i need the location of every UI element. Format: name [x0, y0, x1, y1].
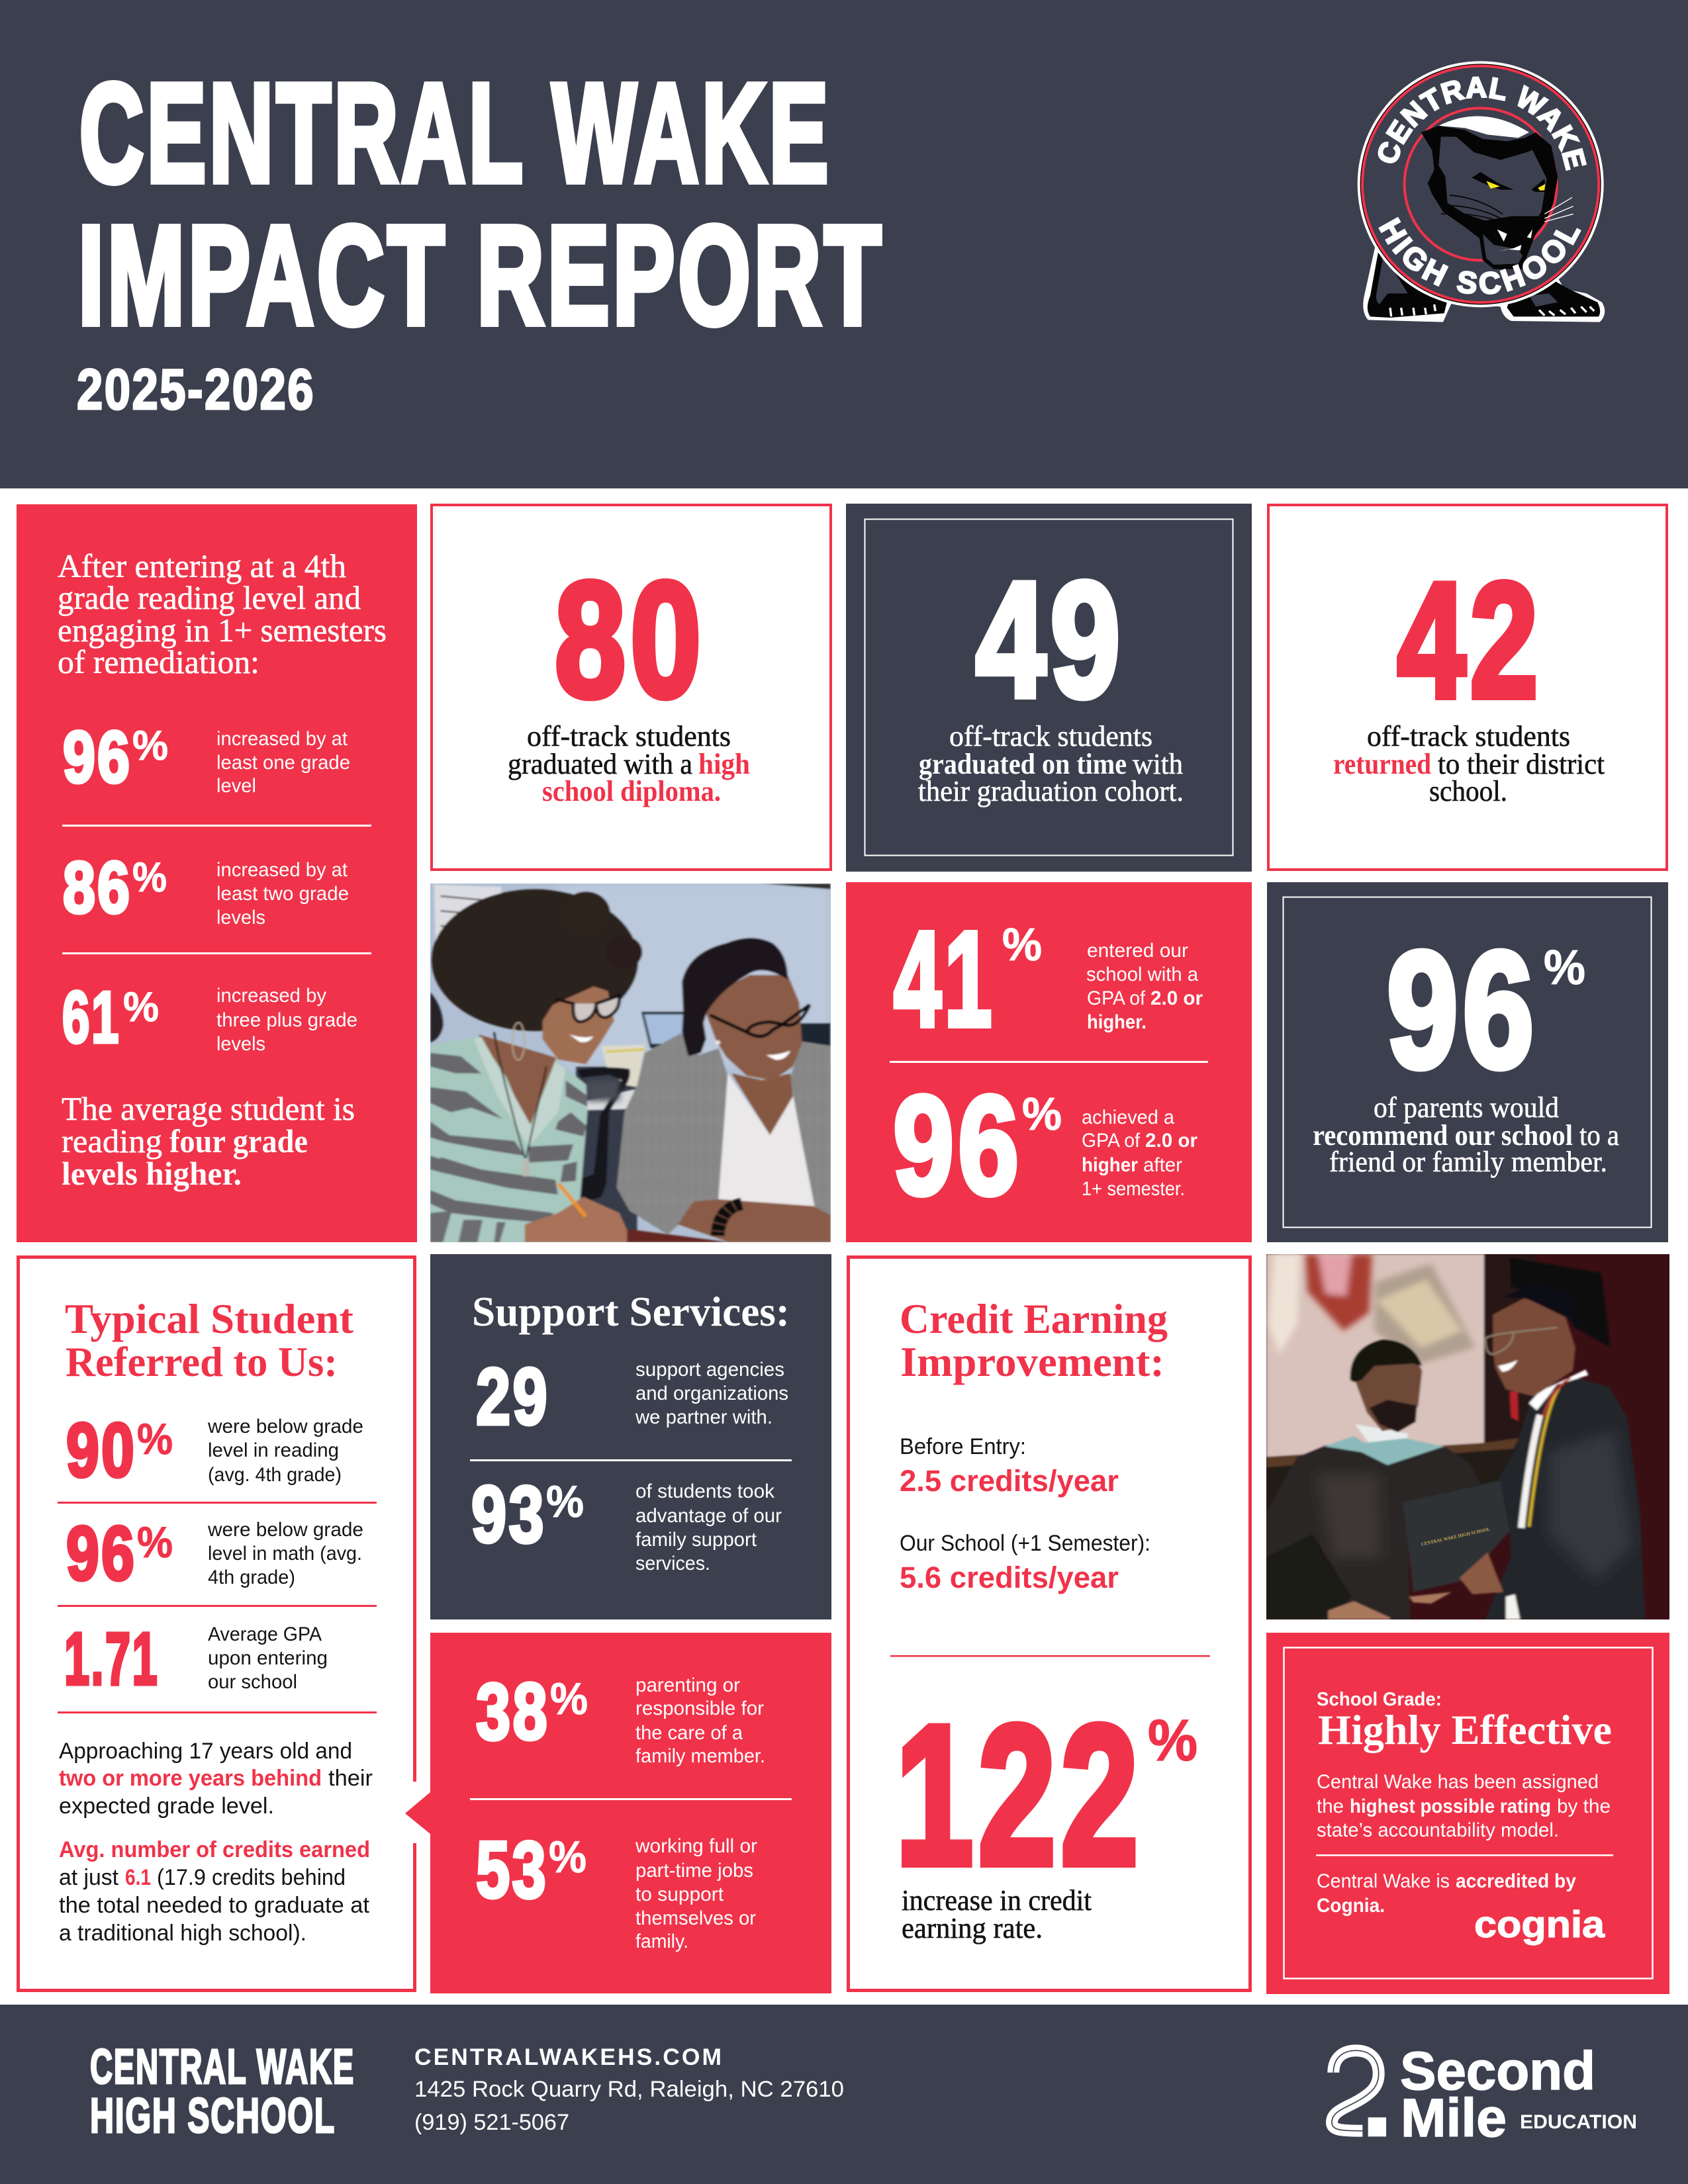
- stat: 61 percent: [62, 977, 357, 1058]
- footer: contact details: [414, 2044, 844, 2135]
- panel: typical student: [19, 1257, 420, 1991]
- stat: 41 percent: 2.0 or: [1150, 987, 1203, 1009]
- footer: school name: [90, 2039, 355, 2143]
- icon: cognia logo: cognia: [1474, 1903, 1605, 1946]
- stat: 90 percent: 90: [66, 1407, 136, 1493]
- panel: 49 on time: [846, 504, 1252, 872]
- stat: 86 percent: [63, 847, 349, 929]
- photo: two women at desk: [430, 884, 831, 1242]
- text: approaching 17: Approaching 17 years old and: [59, 1739, 352, 1764]
- text: accreditation: Cognia.: [1317, 1895, 1385, 1917]
- text: before entry: Before Entry:: [900, 1434, 1026, 1459]
- text: diploma: high: [698, 748, 750, 780]
- icon: second mile education logo: EDUCATION: [1520, 2111, 1637, 2133]
- stat: 86 percent: increased by at: [216, 859, 348, 881]
- heading: credit earning: Improvement:: [900, 1338, 1164, 1385]
- icon: school panther logo: HIGH SCHOOL: [1378, 217, 1581, 295]
- heading: support services: Support Services:: [472, 1288, 790, 1335]
- panel: 80 graduates: [432, 505, 831, 870]
- footer: contact details: CENTRALWAKEHS.COM: [414, 2044, 724, 2070]
- text: accreditation: [1317, 1870, 1576, 1917]
- text: on time: their graduation cohort.: [918, 775, 1184, 807]
- stat: 96 percent math: %: [137, 1518, 173, 1567]
- text: recommend: [1313, 1091, 1619, 1178]
- stat: 41 percent: GPA of: [1087, 987, 1146, 1009]
- text: our school: 5.6 credits/year: [900, 1561, 1119, 1594]
- stat: 96 percent: increased by at: [216, 728, 348, 750]
- stat: 38 percent: %: [550, 1674, 588, 1724]
- text: diploma: off-track students: [527, 720, 731, 752]
- stat: 29 agencies: we partner with.: [635, 1406, 773, 1428]
- panel: reading growth: [17, 504, 417, 1242]
- heading: highly effective: Highly Effective: [1318, 1706, 1612, 1753]
- stat: 86 percent: levels: [216, 907, 265, 929]
- text: accreditation: Central Wake is: [1317, 1870, 1450, 1892]
- heading: credit earning: Credit Earning: [900, 1295, 1168, 1342]
- big number 122 percent: 122: [896, 1684, 1143, 1906]
- title: [78, 54, 884, 353]
- stat: 61 percent: increased by: [216, 985, 326, 1007]
- text: rating: state’s accountability model.: [1317, 1819, 1559, 1841]
- stat: 96 percent GPA: achieved a: [1082, 1107, 1174, 1128]
- footer: contact details: (919) 521-5067: [414, 2110, 569, 2135]
- stat: 93 percent: family support: [635, 1529, 757, 1551]
- stat: 29 agencies: support agencies: [635, 1359, 784, 1381]
- heading: typical student: Typical Student: [65, 1295, 354, 1342]
- stat: 53 percent: working full or: [635, 1835, 757, 1857]
- text: school grade: School Grade:: [1317, 1689, 1442, 1710]
- stat: 93 percent: %: [546, 1477, 584, 1527]
- title: IMPACT REPORT: [78, 197, 884, 353]
- header band: [0, 0, 1688, 488]
- text: our school: [900, 1531, 1150, 1594]
- text: average credits: at just: [59, 1865, 119, 1890]
- stat: 61 percent: 61: [62, 977, 120, 1058]
- text: average credits: the total needed to graduate at: [59, 1893, 370, 1918]
- text: average credits: (17.9 credits behind: [157, 1865, 346, 1890]
- stat: 96 percent math: 96: [66, 1510, 136, 1596]
- stat: 90 percent: [66, 1407, 363, 1493]
- big number 96 percent: 96: [1387, 917, 1538, 1102]
- text: rating: highest possible rating: [1350, 1796, 1551, 1817]
- panel: school grade: [1266, 1633, 1669, 1994]
- footer band: [0, 2005, 1688, 2184]
- stat: 86 percent: 86: [63, 847, 132, 929]
- heading: after entering: of remediation:: [58, 643, 259, 680]
- footer: contact details: 1425 Rock Quarry Rd, Raleigh, NC 27610: [414, 2077, 844, 2102]
- icon: second mile education logo: Second: [1400, 2041, 1595, 2101]
- stat: 96 percent GPA: 2.0 or: [1145, 1130, 1197, 1152]
- text: average credits: 6.1: [125, 1865, 151, 1890]
- stat: 96 percent: least one grade: [216, 752, 350, 774]
- text: our school: Our School (+1 Semester):: [900, 1531, 1150, 1556]
- panel: 42 returned: [1268, 505, 1667, 870]
- text: average credits: Avg. number of credits earned: [59, 1837, 370, 1862]
- stat: 41 percent: [894, 903, 1203, 1055]
- stat: 96 percent: %: [132, 723, 168, 769]
- text: on time: with: [1133, 748, 1183, 780]
- text: average student: [62, 1090, 355, 1192]
- text: rating: the: [1317, 1796, 1344, 1817]
- text: rating: by the: [1557, 1796, 1611, 1817]
- stat: 29 agencies: [476, 1351, 788, 1441]
- text: returned: school.: [1429, 775, 1507, 807]
- stat: 53 percent: 53: [476, 1825, 548, 1915]
- stat: 53 percent: part-time jobs: [635, 1860, 753, 1882]
- stat: 38 percent: parenting or: [635, 1674, 740, 1696]
- panel: support services: [430, 1254, 831, 1619]
- footer: school name: HIGH SCHOOL: [90, 2088, 336, 2143]
- stat: 61 percent: three plus grade: [216, 1009, 357, 1031]
- panel: family responsibilities: [405, 1633, 831, 1993]
- stat: 96 percent GPA: 1+ semester.: [1082, 1178, 1185, 1200]
- stat: 61 percent: levels: [216, 1033, 265, 1055]
- stat: 96 percent GPA: %: [1022, 1088, 1062, 1140]
- stat: 38 percent: [476, 1666, 765, 1767]
- stat: 96 percent: [63, 717, 350, 798]
- stat: 29 agencies: 29: [476, 1351, 549, 1441]
- stat: 53 percent: themselves or: [635, 1907, 756, 1929]
- stat: 38 percent: 38: [476, 1666, 549, 1756]
- text: returned: [1333, 720, 1605, 807]
- stat: 90 percent: %: [137, 1414, 173, 1463]
- text: approaching 17: their: [328, 1766, 373, 1791]
- big number 96 percent: %: [1544, 940, 1585, 995]
- subtitle: year: 2025-2026: [77, 358, 315, 422]
- stat: 96 percent math: level in math (avg.: [208, 1543, 362, 1565]
- text: approaching 17: expected grade level.: [59, 1794, 274, 1819]
- text: recommend: recommend our school: [1313, 1119, 1573, 1152]
- stat: 1.71 GPA: upon entering: [208, 1647, 328, 1669]
- stat: 38 percent: responsible for: [635, 1698, 764, 1719]
- text: returned: returned: [1333, 748, 1431, 780]
- heading: credit earning: [900, 1295, 1168, 1385]
- text: approaching 17: two or more years behind: [59, 1766, 322, 1791]
- text: recommend: to a: [1579, 1119, 1619, 1152]
- text: increase in credit: earning rate.: [902, 1912, 1043, 1944]
- heading: after entering: After entering at a 4th: [58, 547, 346, 584]
- stat: 53 percent: to support: [635, 1884, 724, 1905]
- stat: 96 percent math: were below grade: [207, 1519, 363, 1541]
- stat: 1.71 GPA: [64, 1617, 328, 1700]
- text: on time: [918, 720, 1184, 807]
- text: approaching 17: [59, 1739, 373, 1819]
- text: before entry: [900, 1434, 1119, 1498]
- text: accreditation: accredited by: [1456, 1870, 1576, 1892]
- big number 80: 80: [555, 547, 706, 731]
- stat: 90 percent: (avg. 4th grade): [208, 1464, 342, 1486]
- text: returned: off-track students: [1367, 720, 1570, 752]
- text: recommend: friend or family member.: [1329, 1146, 1607, 1178]
- stat: 86 percent: least two grade: [216, 883, 349, 905]
- stat: 90 percent: were below grade: [207, 1416, 363, 1437]
- panel: credit earning improvement: [849, 1257, 1250, 1991]
- text: rating: Central Wake has been assigned: [1317, 1771, 1599, 1793]
- photo: graduation handshake: CENTRAL WAKE HIGH SCHOOL: [1421, 1526, 1491, 1547]
- stat: 96 percent GPA: after: [1143, 1154, 1182, 1176]
- text: increase in credit: [902, 1884, 1092, 1944]
- stat: 38 percent: the care of a: [635, 1722, 743, 1744]
- text: on time: off-track students: [949, 720, 1152, 752]
- text: diploma: school diploma.: [542, 775, 721, 807]
- stat: 93 percent: [471, 1469, 782, 1574]
- stat: 53 percent: %: [549, 1832, 586, 1882]
- heading: after entering: engaging in 1+ semesters: [58, 612, 387, 649]
- stat: 53 percent: [476, 1825, 757, 1952]
- stat: 96 percent GPA: [893, 1067, 1197, 1224]
- panel: parents recommend: [1267, 882, 1668, 1242]
- heading: after entering: grade reading level and: [58, 579, 361, 616]
- stat: 1.71 GPA: our school: [208, 1671, 297, 1693]
- stat: 96 percent GPA: higher: [1082, 1154, 1138, 1176]
- big number 42: 42: [1397, 548, 1542, 732]
- stat: 41 percent: entered our: [1087, 940, 1188, 962]
- text: average student: levels higher.: [62, 1155, 242, 1192]
- stat: 96 percent GPA: 96: [893, 1067, 1023, 1224]
- stat: 41 percent: higher.: [1087, 1011, 1147, 1033]
- icon: school panther logo: [1357, 61, 1605, 322]
- stat: 90 percent: level in reading: [208, 1439, 339, 1461]
- text: average student: The average student is: [62, 1090, 355, 1127]
- text: average credits: a traditional high school).: [59, 1921, 306, 1946]
- text: before entry: 2.5 credits/year: [900, 1464, 1119, 1498]
- heading: typical student: Referred to Us:: [66, 1338, 338, 1385]
- stat: 41 percent: 41: [894, 903, 995, 1055]
- stat: 93 percent: of students took: [635, 1480, 775, 1502]
- big number 122 percent: %: [1148, 1707, 1197, 1773]
- stat: 41 percent: %: [1002, 919, 1042, 970]
- text: returned: to their district: [1438, 748, 1605, 780]
- heading: after entering: [58, 547, 387, 680]
- stat: 1.71 GPA: Average GPA: [208, 1623, 322, 1645]
- panel: GPA stats: [846, 882, 1252, 1242]
- title: CENTRAL WAKE: [79, 54, 831, 211]
- text: diploma: [508, 720, 750, 807]
- stat: 38 percent: family member.: [635, 1745, 765, 1767]
- footer: school name: CENTRAL WAKE: [90, 2039, 355, 2094]
- photo: graduation handshake: [1266, 1254, 1669, 1619]
- icon: second mile education logo: Mile: [1401, 2088, 1507, 2148]
- text: recommend: of parents would: [1374, 1091, 1559, 1124]
- stat: 93 percent: advantage of our: [635, 1505, 782, 1527]
- stat: 1.71 GPA: 1.71: [64, 1617, 159, 1700]
- text: on time: graduated on time: [919, 748, 1127, 780]
- text: average credits: [59, 1837, 370, 1946]
- stat: 93 percent: services.: [635, 1553, 710, 1574]
- stat: 96 percent math: 4th grade): [208, 1567, 295, 1588]
- heading: typical student: [65, 1295, 354, 1385]
- stat: 29 agencies: and organizations: [635, 1383, 788, 1404]
- big number 49: 49: [976, 547, 1125, 731]
- stat: 86 percent: %: [132, 854, 167, 901]
- icon: second mile education logo: [1332, 2041, 1637, 2148]
- text: rating: [1317, 1771, 1611, 1841]
- text: average student: reading: [62, 1122, 162, 1160]
- stat: 96 percent math: [66, 1510, 363, 1596]
- stat: 61 percent: %: [123, 984, 159, 1030]
- stat: 41 percent: school with a: [1086, 964, 1198, 985]
- stat: 96 percent: 96: [63, 717, 132, 798]
- stat: 96 percent GPA: GPA of: [1082, 1130, 1141, 1152]
- stat: 53 percent: family.: [635, 1931, 688, 1952]
- text: increase in credit: increase in credit: [902, 1884, 1092, 1917]
- stat: 96 percent: level: [216, 775, 256, 797]
- text: diploma: graduated with a: [508, 748, 692, 780]
- text: average student: four grade: [169, 1122, 308, 1160]
- icon: school panther logo: CENTRAL WAKE: [1378, 77, 1587, 171]
- stat: 93 percent: 93: [471, 1469, 546, 1559]
